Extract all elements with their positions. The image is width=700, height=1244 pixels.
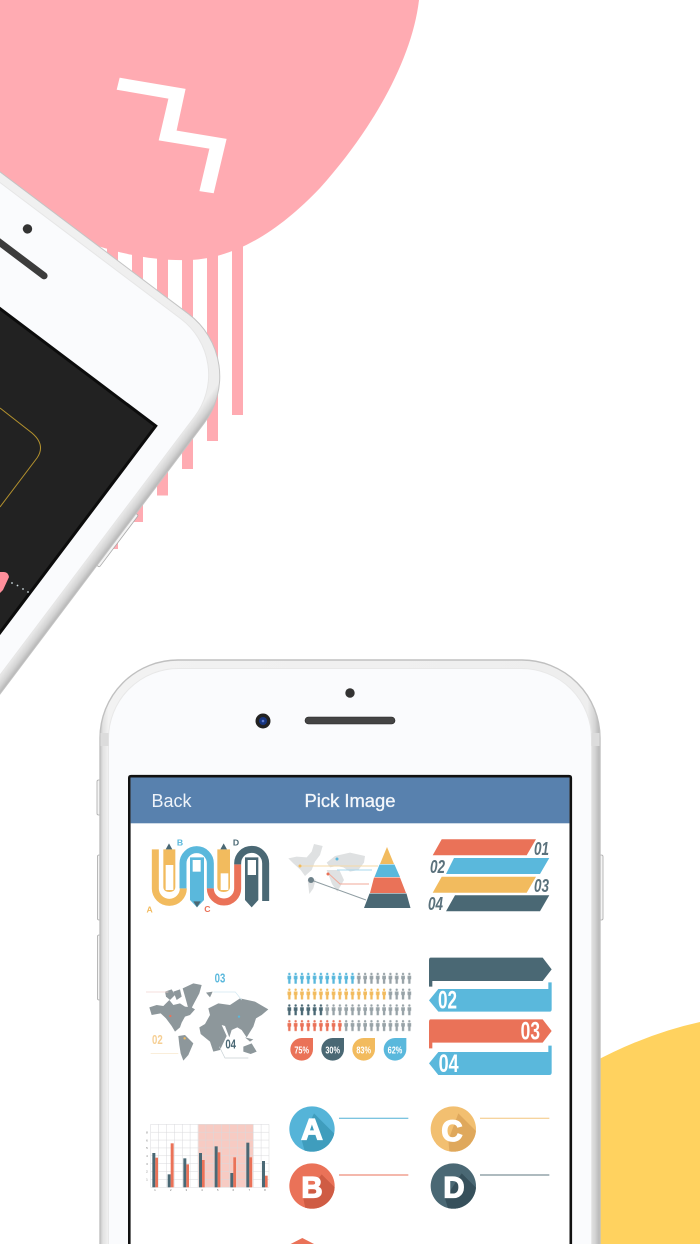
line A [339,1118,408,1119]
axis labels: 3 [146,1162,148,1166]
speaker [0,221,49,281]
letters [147,837,239,914]
axis labels: 2 [170,1188,172,1192]
percent badges [290,1038,406,1061]
side button [95,512,138,567]
white zigzag [117,78,226,193]
bar numbers: 02 [430,857,445,877]
dark bars [152,1143,265,1187]
thumbnail: bar chart [146,1124,269,1192]
pencil yellow A [163,843,175,892]
ribbon numbers: 02 [438,988,457,1015]
bar numbers: 01 [534,839,549,859]
faint world map [288,844,365,894]
phone face [108,668,592,1244]
phone face [0,70,237,1144]
pencil dark D [245,857,258,907]
pyramid [364,847,410,908]
axis labels: 3 [185,1188,187,1192]
continents [149,983,268,1061]
highlight band [198,1124,253,1187]
red bars [155,1143,268,1187]
percent badges: 75% [294,1045,309,1056]
badge A: A [301,1114,323,1147]
rotated phone [0,58,253,1161]
phone body [100,660,600,1244]
map numbers: 02 [152,1032,163,1047]
pink stripes [107,240,243,549]
bar numbers: 03 [534,876,549,896]
screen content: pink card [0,572,9,593]
map numbers: 03 [215,970,225,985]
side buttons [97,780,603,1000]
letters: C [204,904,211,914]
axis labels [146,1130,266,1192]
ribbon numbers: 03 [521,1018,540,1045]
axis labels: 6 [232,1188,234,1192]
antenna bands [100,733,600,746]
partial hexagon badge [289,1238,315,1244]
axis labels: 4 [201,1188,203,1192]
axis labels: 1 [146,1178,148,1182]
axis labels: 7 [248,1188,250,1192]
dark screen [0,161,156,1065]
pink blob [0,0,419,260]
thumbnail: map and pyramid [288,844,410,908]
thumbnail: pencil infographic [147,837,266,914]
badge C: C [441,1115,463,1148]
axis labels: 8 [146,1130,148,1134]
sensor [21,222,34,235]
ribbon numbers: 04 [439,1051,459,1078]
percent badges: 30% [325,1045,340,1056]
percent badges: 83% [356,1045,371,1056]
badge D: D [443,1172,465,1205]
screen content: outline card [0,408,41,507]
line D [480,1174,549,1176]
axis labels: 8 [264,1188,266,1192]
yellow circle [590,1022,700,1244]
axis labels: 4 [146,1154,148,1158]
axis labels: 1 [154,1188,156,1192]
main phone [97,660,603,1244]
ribbon blue 04 [429,1046,552,1075]
axis labels: 2 [146,1170,148,1174]
bar numbers [428,839,549,914]
thumbnail: world map [146,970,268,1061]
camera [256,714,270,728]
letters: A [147,904,154,914]
pins [298,858,338,883]
nav title: Pick Image [305,790,395,811]
ribbon numbers [438,988,540,1078]
ribbon red 03 [429,1019,552,1048]
speaker [305,717,395,724]
screen [129,776,571,1244]
ribbon blue 02 [429,982,552,1012]
badge B: B [301,1172,323,1205]
thumbnail: slanted bars [428,839,549,914]
nav bar [131,778,569,823]
phone body [0,58,251,1160]
axis labels: 5 [146,1146,148,1150]
ribbon dark [429,958,552,987]
line B [339,1174,408,1176]
people rows [286,971,413,1034]
pencil blue B [190,857,204,907]
thumbnail: ribbons [429,958,552,1078]
back button: Back [152,791,193,811]
percent badges: 62% [388,1045,402,1056]
map numbers: 04 [225,1037,236,1052]
thumbnail: people percentages [286,971,413,1061]
axis labels: 6 [146,1138,148,1142]
line C [480,1118,549,1119]
chart grid [151,1124,269,1187]
map numbers [152,970,236,1052]
thumbnail: letters C and D [431,1106,549,1215]
sensor [345,688,355,698]
bar numbers: 04 [428,894,443,914]
axis labels: 5 [217,1188,219,1192]
letters: B [177,837,183,847]
tubes [155,849,183,902]
pencil yellow C [217,843,230,892]
letters: D [233,837,239,847]
callout lines [146,992,248,1058]
thumbnail: letters A and B [289,1106,408,1244]
connector lines [300,866,378,900]
map pins [169,1015,240,1039]
screen content: dots [11,582,29,593]
